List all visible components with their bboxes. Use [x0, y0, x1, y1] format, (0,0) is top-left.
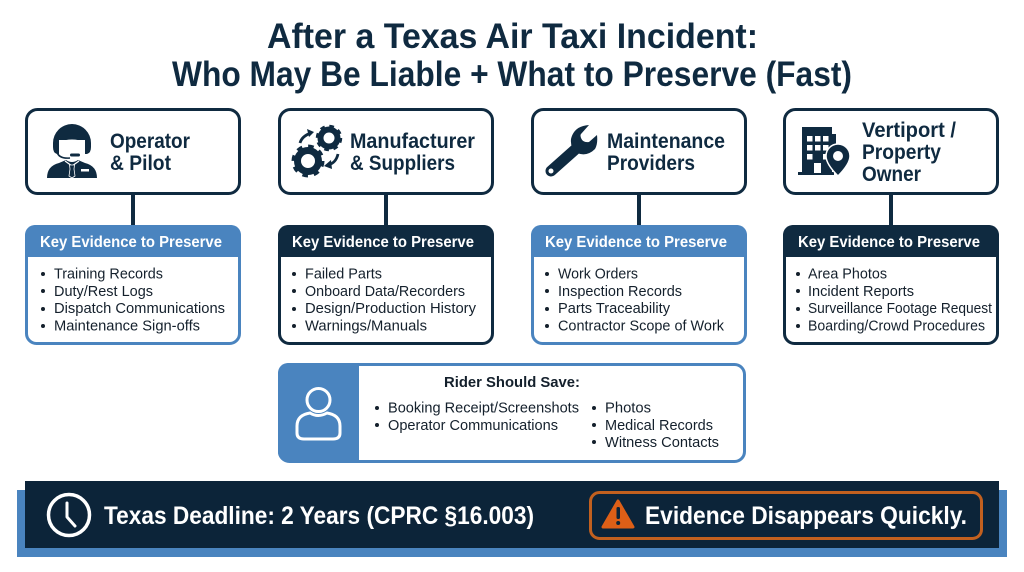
party name: & Suppliers — [350, 151, 455, 175]
party box: manufacturer — [280, 110, 492, 194]
rider heading: Rider Should Save: — [444, 374, 580, 391]
icon: clock — [48, 494, 90, 536]
party name — [350, 129, 476, 175]
title: Who May Be Liable + What to Preserve (Fast) — [172, 55, 852, 94]
panel: rider should save — [278, 363, 744, 462]
evidence card: Key Evidence to Preserve — [292, 234, 474, 251]
party name: Manufacturer — [350, 129, 476, 153]
deadline banner — [17, 481, 1007, 557]
rider list: Medical Records — [605, 417, 713, 434]
party name: & Pilot — [110, 151, 171, 175]
party name — [862, 118, 956, 186]
deadline text: Texas Deadline: 2 Years (CPRC §16.003) — [104, 502, 534, 530]
party name: Property — [862, 140, 941, 164]
evidence card: Key Evidence to Preserve — [798, 234, 980, 251]
title — [172, 17, 852, 94]
evidence card: Duty/Rest Logs — [54, 283, 153, 300]
callout: evidence disappears — [590, 492, 982, 538]
party name: Maintenance — [607, 129, 725, 153]
evidence card: Training Records — [54, 266, 163, 282]
rider list: Booking Receipt/Screenshots — [388, 400, 579, 416]
rider list — [375, 400, 719, 451]
evidence card — [783, 225, 999, 344]
evidence card: Incident Reports — [808, 283, 914, 300]
evidence card — [531, 225, 747, 344]
rider list: Photos — [605, 400, 651, 416]
evidence card: Parts Traceability — [558, 300, 670, 317]
rider list: Witness Contacts — [605, 434, 719, 451]
evidence card: Boarding/Crowd Procedures — [808, 318, 985, 334]
panel: maintenance providers — [531, 110, 747, 344]
title: After a Texas Air Taxi Incident: — [267, 17, 758, 56]
evidence card: Onboard Data/Recorders — [305, 283, 465, 300]
party name: Operator — [110, 129, 191, 153]
panel: manufacturer and suppliers — [278, 110, 494, 344]
icon: building with map pin — [798, 127, 850, 176]
callout: evidence disappears: Evidence Disappears Quickly. — [645, 502, 967, 530]
evidence card: Surveillance Footage Request — [808, 300, 993, 317]
evidence card: Area Photos — [808, 266, 887, 282]
connector: operator to evidence — [131, 193, 135, 226]
evidence card: Key Evidence to Preserve — [545, 234, 727, 251]
party name — [110, 129, 191, 175]
evidence card: Inspection Records — [558, 283, 682, 300]
evidence card: Contractor Scope of Work — [558, 318, 724, 334]
connector: vertiport to evidence — [889, 193, 893, 226]
connector: manufacturer to evidence — [384, 193, 388, 226]
panel: operator and pilot — [25, 110, 241, 344]
evidence card: Maintenance Sign-offs — [54, 318, 200, 334]
evidence card — [25, 225, 241, 344]
party name: Providers — [607, 151, 695, 175]
party box: operator and pilot — [26, 110, 240, 194]
party name: Owner — [862, 162, 922, 186]
party box: vertiport — [784, 110, 998, 194]
evidence card: Key Evidence to Preserve — [40, 234, 222, 251]
panel: vertiport and property owner — [783, 110, 999, 344]
evidence card — [278, 225, 494, 344]
icon: warning triangle — [603, 501, 633, 527]
evidence card: Failed Parts — [305, 266, 382, 282]
evidence card: Dispatch Communications — [54, 300, 225, 317]
icon: wrench — [548, 125, 597, 174]
rider list: Operator Communications — [388, 417, 558, 434]
icon: rider person — [297, 388, 340, 439]
icon: gears and arrows — [294, 126, 340, 176]
evidence card: Warnings/Manuals — [305, 318, 427, 334]
party name — [607, 129, 725, 175]
evidence card: Work Orders — [558, 266, 638, 282]
connector: maintenance to evidence — [637, 193, 641, 226]
party name: Vertiport / — [862, 118, 956, 142]
icon: pilot with headset — [47, 124, 97, 178]
party box: maintenance — [532, 110, 746, 194]
evidence card: Design/Production History — [305, 300, 476, 317]
